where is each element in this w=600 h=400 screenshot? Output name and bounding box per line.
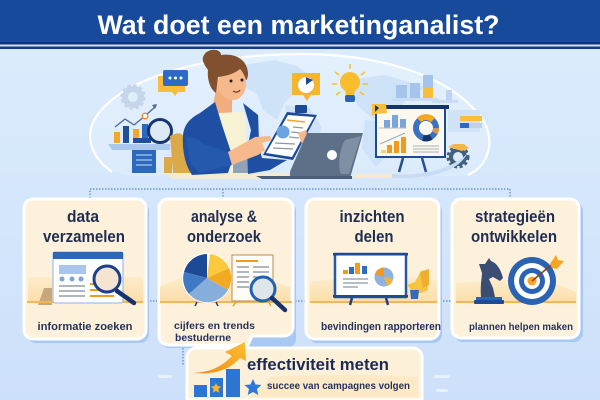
card: analyse en onderzoek: bestuderne bbox=[175, 332, 231, 344]
person bbox=[183, 50, 287, 175]
icon: chart on desk left bbox=[114, 104, 157, 143]
header banner bbox=[0, 0, 600, 49]
hair bbox=[203, 50, 248, 93]
icon: growth arrow and bars bbox=[193, 342, 246, 397]
hero illustration bbox=[90, 50, 489, 179]
blouse bbox=[218, 112, 247, 174]
heading: inzichten bbox=[340, 207, 404, 226]
icon: side card bbox=[448, 110, 482, 132]
presentation board bbox=[372, 104, 449, 172]
forearm and hand bbox=[228, 136, 272, 165]
card: analyse en onderzoek bbox=[159, 199, 296, 348]
clouds beside bottom card bbox=[158, 375, 450, 392]
clipboard bbox=[263, 105, 317, 160]
icon: gear right bbox=[448, 144, 469, 167]
caption: informatie zoeken bbox=[38, 321, 133, 333]
card: data verzamelen bbox=[24, 199, 149, 343]
card: analyse en onderzoek: onderzoek bbox=[187, 227, 261, 246]
laptop bbox=[256, 133, 363, 179]
neck bbox=[213, 90, 232, 122]
title: Wat doet een marketinganalist? bbox=[98, 10, 500, 40]
icon: lightbulb bbox=[332, 64, 368, 102]
heading: data bbox=[67, 207, 99, 226]
icon: star bbox=[244, 379, 262, 395]
caption: succee van campagnes volgen bbox=[267, 380, 410, 392]
icon: floating bars bbox=[392, 75, 458, 103]
card: inzichten delen bbox=[306, 199, 442, 343]
jacket left bbox=[183, 102, 233, 175]
desk bbox=[108, 144, 423, 179]
card: data verzamelen: verzamelen bbox=[43, 227, 125, 246]
icon: pie speech bubble bbox=[292, 73, 320, 101]
caption: cijfers en trends bbox=[174, 320, 255, 332]
face bbox=[214, 68, 246, 100]
icon: chat bubble bbox=[158, 70, 188, 96]
sleeve bbox=[186, 137, 232, 173]
illustration: chess knight and target bbox=[456, 255, 576, 305]
world map shapes bbox=[243, 60, 425, 170]
icon: gear left bbox=[122, 86, 144, 108]
illustration: presentation screen bbox=[310, 253, 437, 305]
hero backdrop blob bbox=[90, 54, 489, 176]
chair bbox=[164, 133, 191, 173]
card: strategieën ontwikkelen: ontwikkelen bbox=[471, 227, 557, 246]
jacket right bbox=[243, 103, 287, 174]
card: strategieën ontwikkelen bbox=[452, 199, 583, 342]
card: inzichten delen: delen bbox=[354, 227, 394, 246]
heading: effectiviteit meten bbox=[247, 355, 389, 374]
card: effectiviteit meten bbox=[187, 342, 422, 400]
icon: magnifier left bbox=[148, 120, 172, 142]
heading: analyse & bbox=[191, 207, 257, 226]
caption: bevindingen rapporteren bbox=[321, 321, 441, 333]
illustration: pie chart and report bbox=[160, 253, 292, 310]
illustration: browser and magnifier bbox=[27, 252, 143, 305]
connector lines bbox=[90, 189, 510, 366]
caption: plannen helpen maken bbox=[469, 321, 573, 333]
heading: strategieën bbox=[475, 207, 555, 226]
